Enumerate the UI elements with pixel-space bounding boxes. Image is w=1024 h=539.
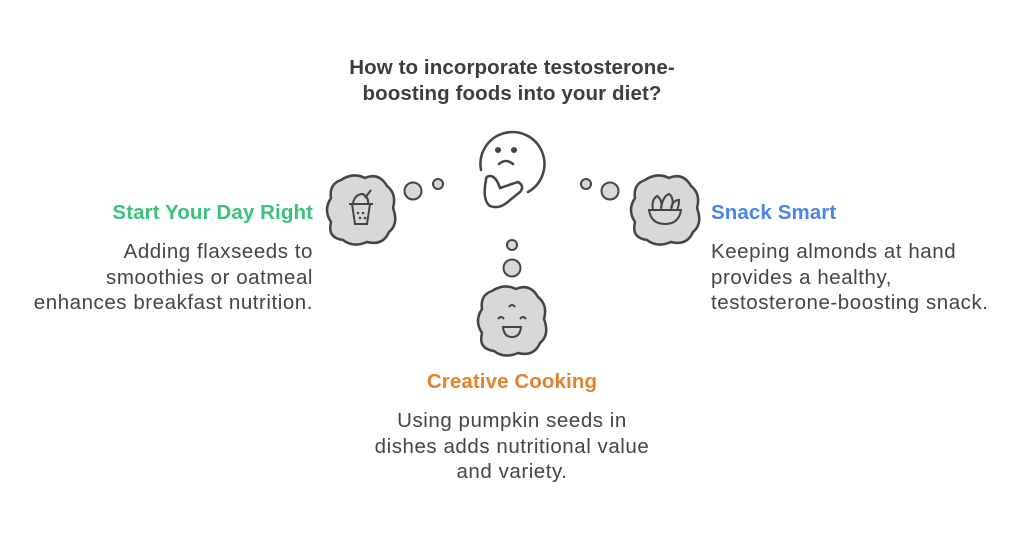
bubbles left	[404, 179, 443, 200]
cloud: creative cooking	[478, 286, 546, 356]
text: snack smart: provides a healthy,	[711, 266, 892, 288]
cloud: snack smart	[631, 175, 699, 245]
heading: creative cooking: Creative Cooking	[427, 370, 597, 393]
text: start your day right	[34, 240, 313, 314]
text: creative cooking: dishes adds nutritional value	[375, 434, 649, 458]
heading: snack smart: Snack Smart	[711, 201, 836, 224]
bubbles bottom	[504, 240, 520, 276]
text: snack smart	[711, 240, 988, 314]
text: creative cooking: and variety.	[456, 460, 568, 483]
title	[349, 56, 675, 105]
text: start your day right: enhances breakfast nutrition.	[34, 291, 313, 314]
title: boosting foods into your diet?	[362, 82, 662, 105]
cloud: start your day right	[327, 175, 395, 245]
icon: thinking face	[480, 132, 544, 207]
text: creative cooking: Using pumpkin seeds in	[397, 409, 627, 432]
bubbles right	[581, 179, 618, 200]
heading: start your day right: Start Your Day Right	[112, 201, 313, 224]
text: creative cooking	[375, 409, 649, 483]
title: How to incorporate testosterone-	[349, 56, 675, 79]
text: start your day right: Adding flaxseeds to	[124, 240, 313, 263]
text: start your day right: smoothies or oatmeal	[106, 266, 313, 288]
text: snack smart: testosterone-boosting snack.	[711, 291, 988, 314]
text: snack smart: Keeping almonds at hand	[711, 240, 956, 263]
